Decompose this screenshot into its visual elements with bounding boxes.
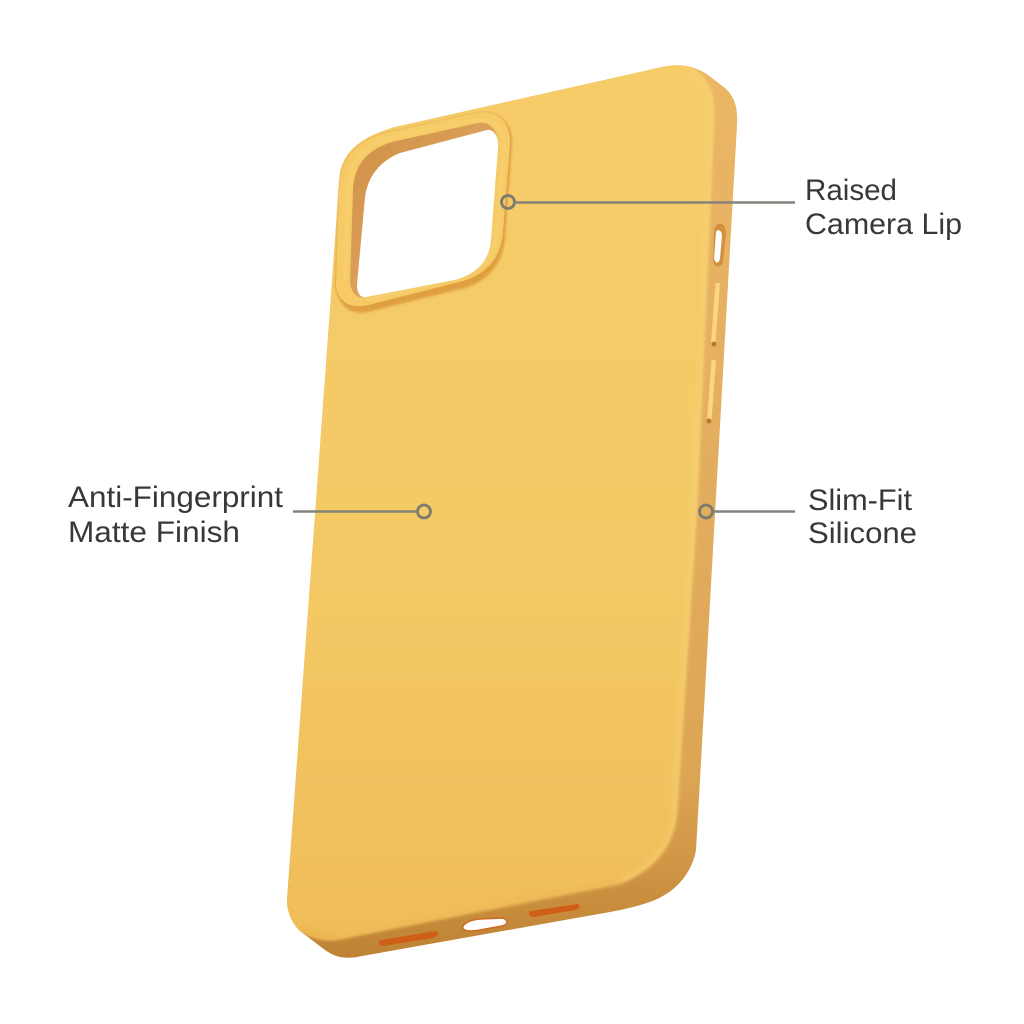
label [68, 481, 284, 549]
label: Raised [805, 174, 897, 207]
charging port [463, 918, 507, 931]
left speaker grille [380, 932, 437, 945]
label [808, 484, 917, 550]
volume down button [707, 360, 716, 421]
case body side wall [287, 65, 737, 958]
camera lip shadow edge [335, 112, 512, 313]
marker ring [502, 196, 514, 208]
callout: slim-fit silicone [700, 484, 917, 550]
label: Anti-Fingerprint [68, 481, 284, 514]
bottom ports [380, 905, 579, 945]
leader line [515, 201, 795, 204]
right speaker grille [530, 905, 579, 916]
mute switch cutout [713, 224, 726, 266]
volume up button [711, 283, 720, 343]
camera opening [357, 130, 498, 297]
lip highlight [345, 120, 504, 300]
case back face [280, 60, 715, 940]
camera inner wall [350, 123, 498, 297]
camera cutout [335, 112, 512, 313]
leader line [713, 510, 795, 513]
label: Slim-Fit [808, 484, 913, 517]
label: Silicone [808, 517, 917, 550]
label: Camera Lip [805, 208, 962, 241]
side buttons and cutouts [706, 224, 726, 424]
label: Matte Finish [68, 516, 240, 549]
callout: anti-fingerprint matte finish [68, 481, 430, 549]
marker ring [418, 505, 430, 518]
leader line [293, 510, 417, 513]
marker ring [700, 505, 712, 518]
phone case [280, 60, 737, 958]
label [805, 174, 962, 241]
callout: raised camera lip [502, 174, 962, 241]
camera raised lip [336, 112, 510, 306]
